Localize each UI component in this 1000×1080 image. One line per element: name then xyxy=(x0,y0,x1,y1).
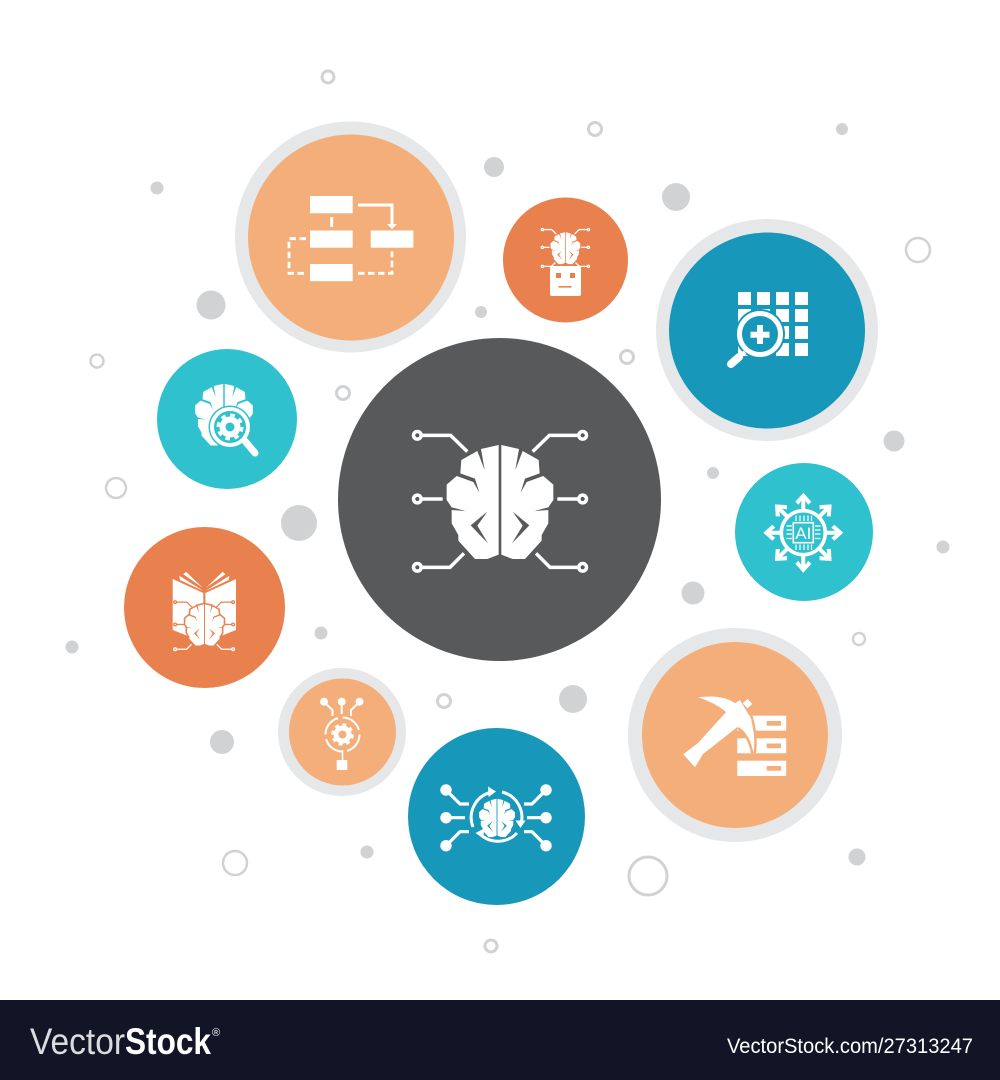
icon: robot with brain xyxy=(541,228,590,296)
panel: data mining bubble xyxy=(628,628,842,842)
panel: book brain bubble xyxy=(124,527,285,688)
panel: central brain bubble xyxy=(338,338,661,661)
icon: circuit brain xyxy=(413,431,586,571)
icon: flowchart xyxy=(289,196,413,281)
panel: robot brain bubble xyxy=(503,198,628,322)
decorative ring dots xyxy=(90,71,930,952)
brand logo: Vector xyxy=(30,1021,125,1062)
brand logo xyxy=(30,1021,220,1062)
icon: brain with cycle and network nodes xyxy=(440,784,552,851)
brand logo: Stock xyxy=(125,1021,211,1062)
panel: brain cycle bubble xyxy=(408,728,585,905)
icon: magnifier over data grid xyxy=(731,292,808,364)
image id: VectorStock.com/27313247 xyxy=(727,1035,973,1058)
panel: brain search bubble xyxy=(157,349,297,489)
footer band xyxy=(0,1000,1000,1080)
panel: flowchart bubble xyxy=(235,122,466,352)
icon: brain with gear magnifier xyxy=(195,384,255,453)
panel: AI chip bubble xyxy=(735,463,873,601)
icon: gear with nodes xyxy=(320,698,364,770)
icon: open book with brain xyxy=(173,572,236,651)
panel: data search bubble xyxy=(656,219,878,441)
panel: gear process bubble xyxy=(278,668,406,796)
icon: AI chip with arrows: AI xyxy=(795,524,811,543)
brand logo: ® xyxy=(212,1027,220,1039)
icon: pickaxe and server stack xyxy=(683,697,786,776)
decorative filled dots xyxy=(66,123,950,866)
